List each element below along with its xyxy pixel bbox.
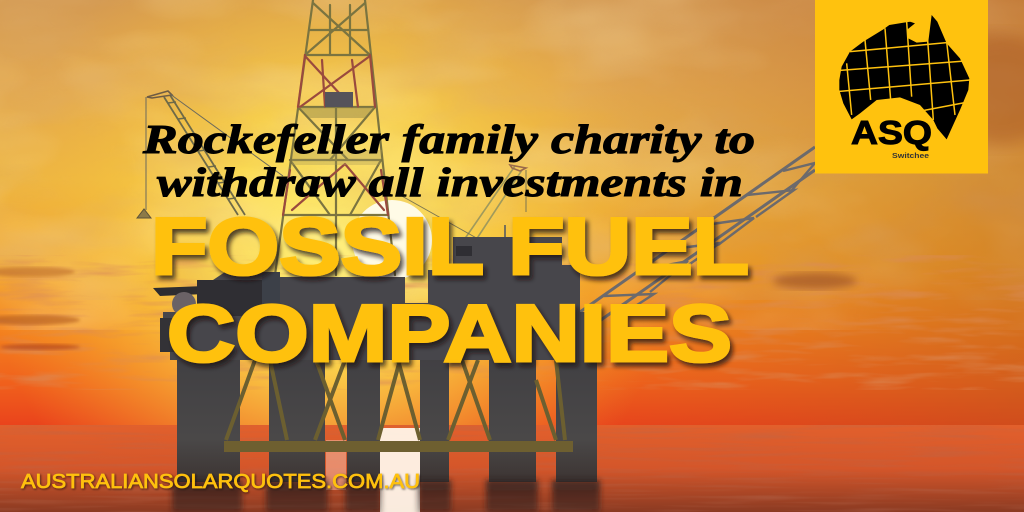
sun reflection on water [326,428,420,512]
small centre crane [400,165,526,246]
logo wordmark ASQ: ASQ [851,114,932,151]
oil platform [153,237,600,512]
platform legs [177,340,597,482]
upper decks [163,237,600,360]
deck machinery [197,246,472,317]
left crane [137,91,283,218]
headline: black subtitle: withdraw all investments in [157,159,743,205]
helideck [153,286,205,352]
pontoon beam [224,441,573,452]
right crane boom [580,147,815,322]
headline: yellow FOSSIL FUEL COMPANIES: FOSSIL FUEL [151,202,749,292]
background: sea [0,425,1024,512]
derrick tower [275,0,395,275]
icon: Australia solar panel map [837,15,970,139]
headline: yellow FOSSIL FUEL COMPANIES [151,202,749,379]
leg reflections [172,480,600,512]
headline: black subtitle [142,116,755,205]
cross braces [226,360,565,440]
logo wordmark Switchee: Switchee [892,153,929,160]
ASQ logo [815,0,988,174]
website URL: AUSTRALIANSOLARQUOTES.COM.AU [21,471,420,493]
sun [352,200,432,280]
headline: yellow FOSSIL FUEL COMPANIES: COMPANIES [167,289,732,379]
headline: black subtitle: Rockefeller family charity to [142,116,755,162]
